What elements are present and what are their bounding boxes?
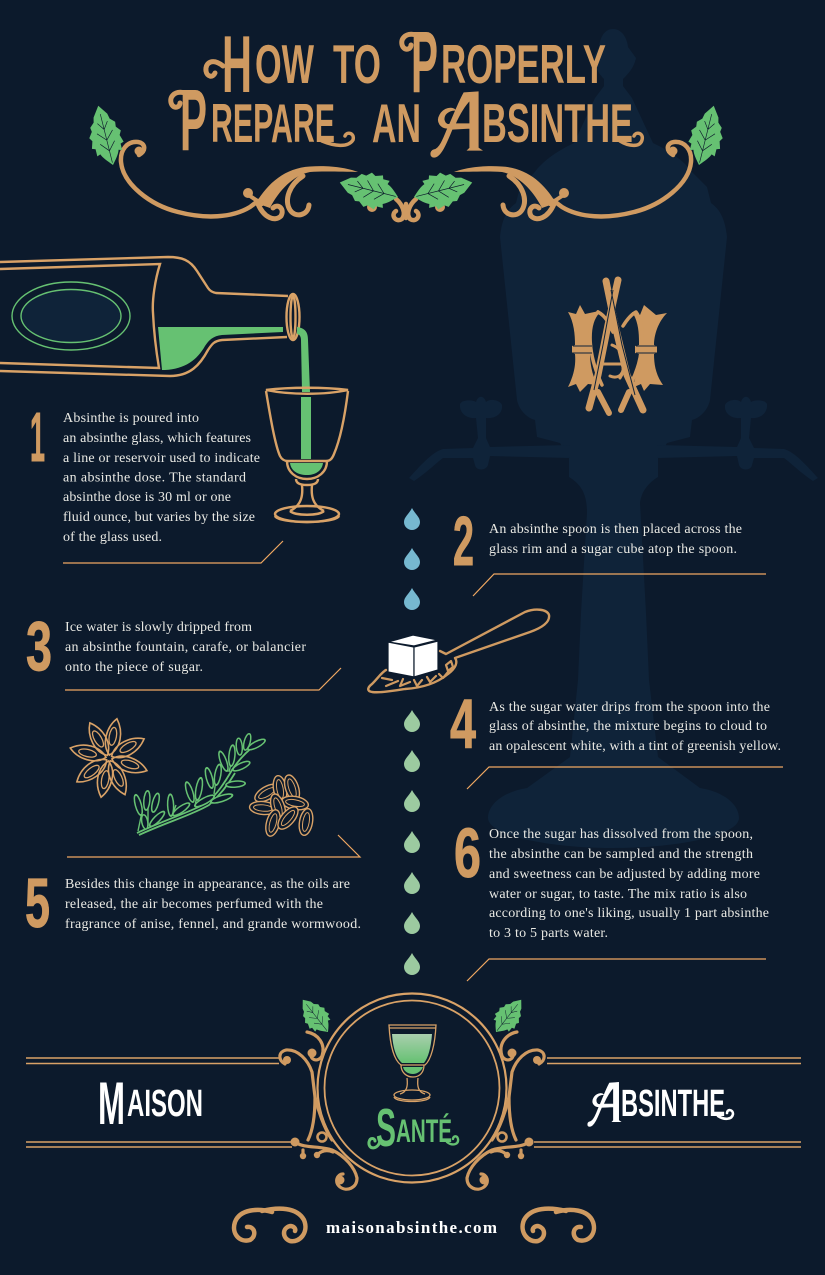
number 6: 6 [454,814,481,892]
step 3 [26,607,341,690]
emblem rings [318,994,506,1182]
title: P [180,72,207,169]
left scrollwork [280,1032,357,1189]
step 1 text: an absinthe glass, which features [63,431,251,446]
emblem leaf left [293,992,337,1040]
title: BSINTHE [482,92,633,154]
star anise [69,717,149,799]
left flourish [121,142,377,219]
leaf: top left [82,102,128,169]
title ornament [82,102,730,220]
step 6 [454,814,769,981]
step 4 [450,685,783,789]
sugar cube [388,635,438,677]
rosemary sprig [133,733,266,835]
step 6 text: to 3 to 5 parts water. [489,926,608,941]
right flourish [435,142,691,219]
step 1 text: of the glass used. [63,530,162,545]
step 6 text: and sweetness can be adjusted by adding more [489,867,760,882]
footer rules [26,1058,801,1147]
step 4 text: an opalescent white, with a tint of greenish yellow. [489,739,781,754]
step 6 text: Once the sugar has dissolved from the spoon, [489,827,753,842]
liquid in glass base [290,463,323,475]
Santé: S [376,1098,396,1158]
step 3 text: Ice water is slowly dripped from [65,620,252,635]
step 1 text: an absinthe dose. The standard [63,470,246,486]
title: ROPERLY [441,33,606,95]
title: H [222,20,252,110]
illustration: herbs [69,717,315,838]
leaf: top right [684,102,730,169]
bottle label oval [12,282,130,350]
leaf: center left [335,166,402,214]
opalescent drops [404,710,420,975]
Santé: ANTÉ [396,1113,452,1149]
step 5 text [65,877,361,932]
title: AN [372,92,421,154]
step 1: 1 [30,398,45,476]
illustration: bottle pouring [0,257,348,522]
emblem [280,992,544,1189]
step 5 text: Besides this change in appearance, as the oils are [65,877,350,892]
spoon [368,610,549,692]
step 2 [453,502,766,596]
brand: Maison: AISON [127,1083,203,1125]
fountain silhouette [409,29,818,848]
step 1 text [63,411,260,545]
footer flourish right [523,1209,594,1241]
step 6 text: according to one's liking, usually 1 part absinthe [489,906,769,921]
step 2 text: An absinthe spoon is then placed across the [489,522,742,537]
footer flourish left [234,1209,305,1241]
website: maisonabsinthe.com [326,1218,497,1237]
liquid in bottle [158,327,283,370]
step 3 text [65,620,306,675]
right sheaf [632,305,667,391]
right scrollwork [467,1032,544,1189]
poured stream [297,327,311,459]
illustration: spoon and sugar cube [368,610,549,692]
title: TO [333,33,381,95]
left sheaf [568,305,599,392]
step 5 text: released, the air becomes perfumed with the [65,897,323,912]
monogram [568,280,667,413]
water drops [404,508,420,610]
title [171,14,642,169]
brand: Maison: M [98,1070,125,1137]
emblem glass [389,1025,436,1102]
title: REPARE [211,92,335,154]
brand: Maison [98,1070,203,1137]
step 1 text: fluid ounce, but varies by the size [63,510,255,525]
number 2: 2 [453,502,474,580]
step 3 text: onto the piece of sugar. [65,660,203,675]
step 4 text: As the sugar water drips from the spoon into the [489,700,770,715]
Santé [369,1098,458,1158]
bottle outline [0,257,288,376]
bottle label panel [0,264,160,368]
step 2 text: glass rim and a sugar cube atop the spoon. [489,542,737,557]
cardamom seeds [249,773,315,838]
step 6 text: water or sugar, to taste. The mix ratio is also [489,887,747,902]
brand: Absinthe: BSINTHE [621,1083,725,1125]
number 4: 4 [450,685,476,763]
number 5: 5 [25,864,50,942]
step 4 text [489,700,781,754]
step 5 text: fragrance of anise, fennel, and grande wormwood. [65,917,361,932]
step 6 text [489,827,769,941]
step 1 text: a line or reservoir used to indicate [63,451,260,466]
step 2 text [489,522,742,557]
step 4 text: glass of absinthe, the mixture begins to cloud to [489,719,767,734]
title: OW [255,33,314,95]
number 3: 3 [26,607,52,685]
center curl [394,199,418,220]
step 5 [25,835,361,942]
step 6 text: the absinthe can be sampled and the strength [489,847,753,862]
brand: Absinthe [588,1082,733,1127]
leaf: center right [410,166,477,214]
step 1 text: absinthe dose is 30 ml or one [63,490,231,505]
emblem leaf right [487,992,531,1040]
step 1 text: Absinthe is poured into [63,411,199,426]
step 3 text: an absinthe fountain, carafe, or balancier [65,640,306,655]
step 1 [30,398,283,563]
glass [266,388,348,522]
center letter strokes [589,280,643,413]
bottle mouth [286,294,300,340]
title: P [411,14,438,111]
